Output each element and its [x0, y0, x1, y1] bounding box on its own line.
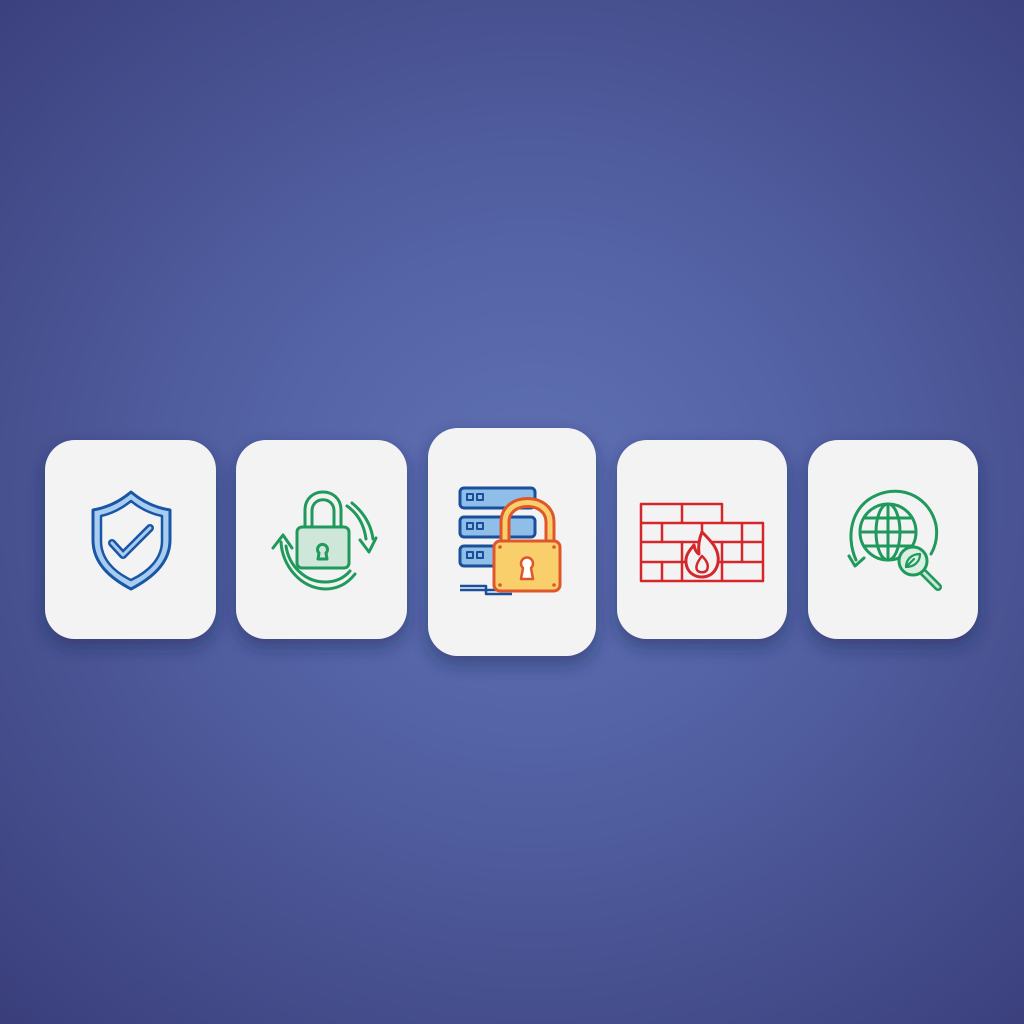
card: lock rotation — [236, 440, 407, 639]
card: globe search — [808, 440, 978, 639]
icon: server with padlock — [460, 488, 560, 594]
icon: shield check — [93, 492, 170, 589]
icon: lock with arrows — [273, 492, 376, 589]
card: firewall — [617, 440, 787, 639]
card: server lock — [428, 428, 596, 656]
card: shield — [45, 440, 216, 639]
icon: globe with magnifier — [849, 491, 938, 587]
icon: brick wall with flame — [641, 504, 763, 581]
